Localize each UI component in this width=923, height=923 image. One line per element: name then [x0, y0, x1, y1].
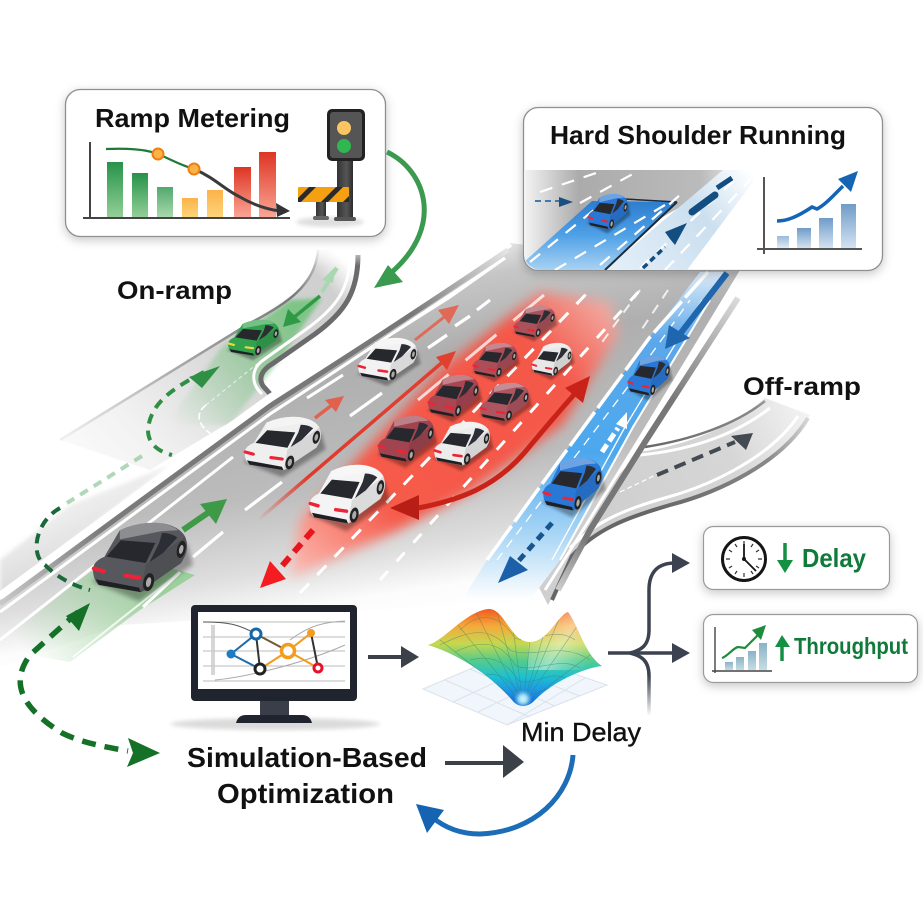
- highway scene: [0, 243, 810, 767]
- arrow: blue feedback loop: [416, 755, 573, 834]
- monitor icon: [170, 605, 380, 730]
- red congestion zone: [290, 292, 618, 578]
- cars: [91, 306, 673, 601]
- main barrier: [0, 243, 510, 612]
- car: blue top: [627, 356, 673, 401]
- off-ramp road: [530, 398, 810, 605]
- car: red two: [427, 375, 482, 422]
- icon: down arrow: [777, 543, 793, 573]
- car: white middle: [433, 422, 493, 471]
- arrow: salmon short: [315, 396, 344, 418]
- panel: hard shoulder running: [524, 108, 882, 270]
- shoulder road scene: [524, 170, 750, 270]
- arrow: thick red curved: [390, 376, 590, 520]
- lane markings: [0, 258, 710, 657]
- arrow: blue solid down: [665, 273, 727, 349]
- on-ramp road: [0, 244, 370, 596]
- arrow: blue dashed down: [498, 523, 552, 583]
- panel: throughput result: [704, 614, 918, 682]
- car: white lane two: [243, 417, 326, 477]
- icon: blue car on shoulder: [587, 194, 630, 234]
- arrow: branch to outcomes: [608, 553, 690, 716]
- floor grid: [423, 652, 607, 725]
- heading: simulation-based optimization: [187, 742, 427, 809]
- car: white top: [357, 338, 421, 386]
- car: white large: [308, 465, 390, 531]
- label: off-ramp: Off-ramp: [743, 373, 861, 401]
- arrow: green loop dashed: [37, 366, 220, 590]
- chart: throughput rising: [757, 171, 862, 254]
- text: delay: Delay: [802, 543, 866, 573]
- arrow: long red line: [258, 351, 456, 520]
- panel: ramp metering: [66, 90, 386, 236]
- arrow: green lower dashed to optimization: [20, 603, 160, 767]
- heading: ramp metering: Ramp Metering: [95, 103, 290, 133]
- arrow: on-ramp flow down: [283, 296, 320, 327]
- arrow: off-ramp dashed: [657, 433, 753, 475]
- surface plot: min delay: [423, 605, 610, 725]
- network graph: [203, 621, 345, 681]
- arrow: green lane forward: [183, 499, 227, 530]
- car: dark sedan: [91, 523, 193, 601]
- car: red one: [377, 416, 437, 468]
- icon: traffic light and barrier: [296, 109, 365, 227]
- heading: hard shoulder running: Hard Shoulder Running: [550, 120, 846, 150]
- arrow: ramp metering to on-ramp: [374, 152, 424, 288]
- panel: delay result: [704, 526, 890, 590]
- car: green: [227, 320, 282, 360]
- main highway surface: [0, 243, 740, 668]
- arrowhead: on-ramp up: [322, 266, 336, 283]
- label: on-ramp: On-ramp: [117, 277, 232, 305]
- arrow: on-ramp light dashed flow: [322, 268, 337, 292]
- car: white rear: [531, 343, 574, 380]
- arrow: salmon top: [415, 305, 459, 340]
- blue hard shoulder lane: [462, 272, 727, 600]
- arrow: optimization to min delay: [445, 745, 524, 778]
- car: red four: [472, 343, 520, 382]
- chart: mini throughput: [712, 625, 772, 673]
- bar chart: ramp flow: [83, 142, 290, 218]
- car: red five: [513, 306, 558, 341]
- heading: simulation-based optimization: Optimization: [217, 778, 394, 809]
- icon: clock: [722, 538, 766, 580]
- icon: up arrow: [775, 635, 790, 661]
- car: blue bottom: [542, 458, 606, 517]
- surface mesh: [440, 605, 590, 705]
- text: throughput: Throughput: [794, 633, 908, 659]
- heading: simulation-based optimization: Simulation-Based: [187, 742, 427, 773]
- lower green lane: [0, 553, 195, 662]
- arrow: red dashed down: [260, 530, 313, 588]
- arrow: white lane up: [602, 412, 627, 452]
- right barrier: [558, 298, 738, 590]
- arrow: monitor to surface: [368, 646, 419, 668]
- car: red three: [479, 383, 532, 426]
- label: min delay: Min Delay: [521, 717, 641, 747]
